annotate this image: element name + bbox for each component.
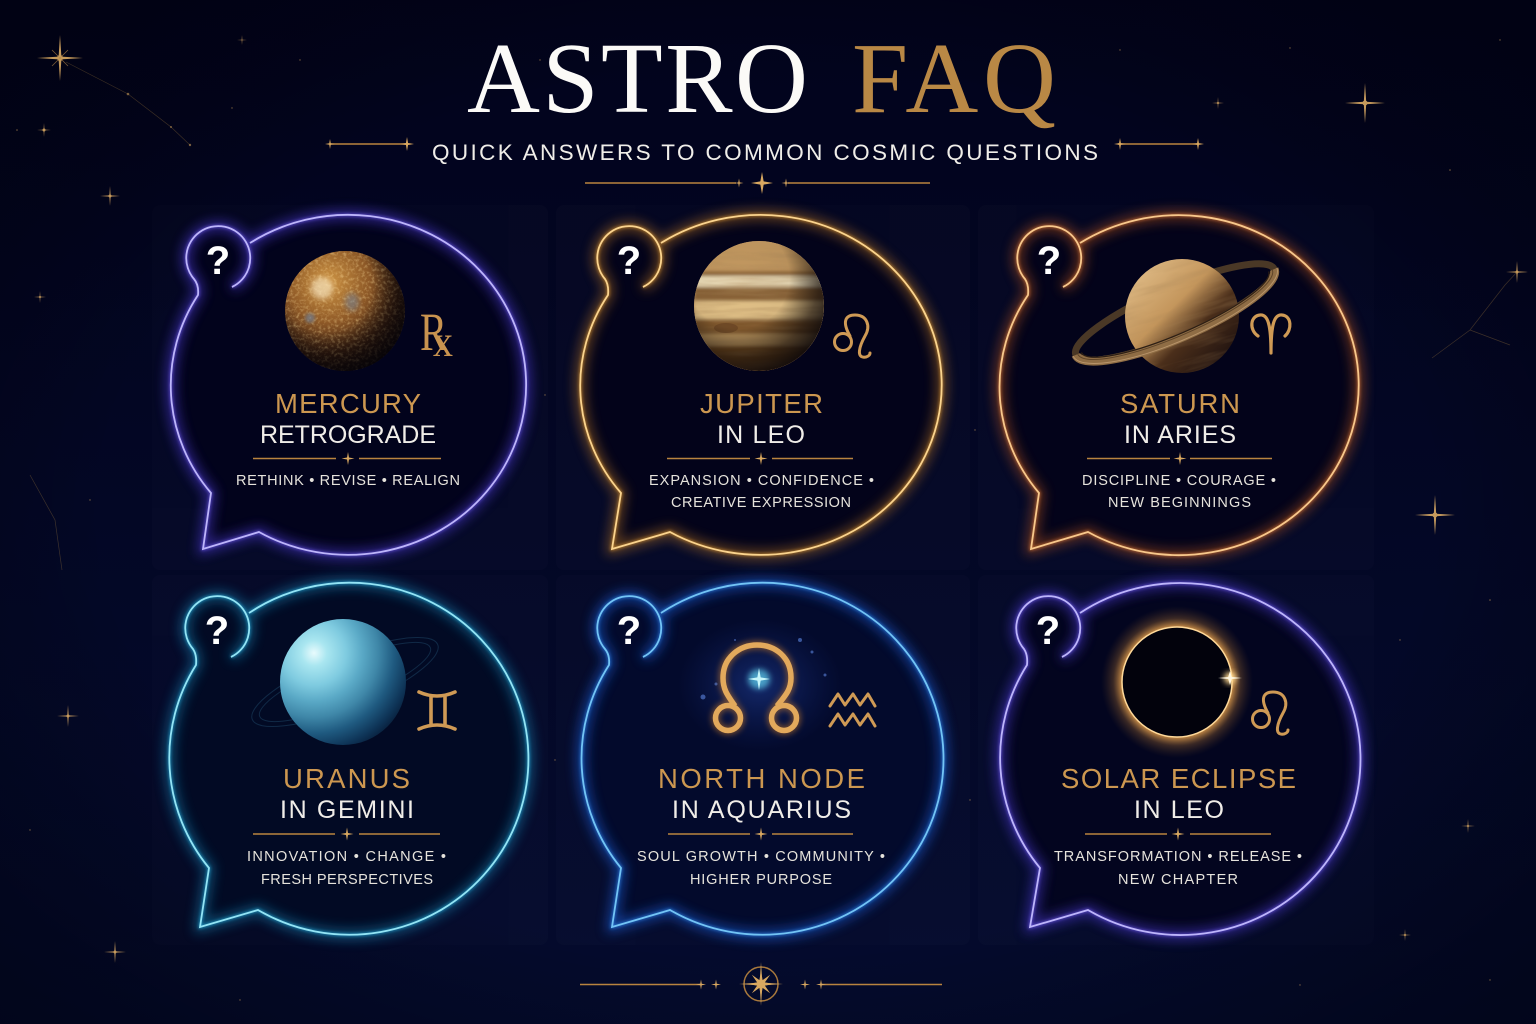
heading [1120,388,1240,449]
keywords: CREATIVE EXPRESSION [671,495,851,511]
heading: NORTH NODE [658,763,865,794]
divider [253,828,440,840]
divider [253,452,441,465]
question mark: ? [617,609,641,653]
bubble outline [171,215,526,555]
keywords: DISCIPLINE • COURAGE • [1082,473,1276,489]
keywords [247,849,446,888]
heading: IN LEO [1134,796,1224,824]
heading [260,388,436,449]
planet: Mercury [285,251,405,371]
bubble outline [1000,215,1359,555]
card: Saturn in Aries [1000,215,1359,555]
symbol: North Node [716,645,796,730]
keywords: FRESH PERSPECTIVES [261,872,433,888]
planet: Jupiter [694,241,824,372]
keywords [649,473,874,511]
symbol: Aries [1252,315,1290,353]
keywords [1082,473,1276,511]
eclipse [1101,606,1253,758]
heading: SOLAR ECLIPSE [1061,763,1296,794]
card: Uranus in Gemini [169,583,528,935]
divider [667,452,853,465]
title: ASTRO [467,22,808,134]
divider [1085,828,1271,840]
header ornaments [325,137,1204,194]
keywords: HIGHER PURPOSE [690,872,832,888]
planet: Saturn [1072,259,1280,373]
question mark: ? [617,239,641,283]
question mark: ? [206,239,230,283]
divider [668,828,853,840]
heading: JUPITER [700,388,823,419]
keywords: EXPANSION • CONFIDENCE • [649,473,874,489]
heading: IN GEMINI [280,796,414,824]
keywords: NEW BEGINNINGS [1108,495,1251,511]
heading [658,763,865,824]
heading [280,763,414,824]
heading: SATURN [1120,388,1240,419]
question mark: ? [1037,239,1061,283]
planet: Uranus [243,619,447,745]
symbol: retrograde: R [420,302,447,362]
symbol: Aquarius [830,694,875,726]
nebula [678,619,842,751]
bubble outline [169,583,528,935]
card: Solar Eclipse in Leo [1000,583,1360,935]
keywords [1054,849,1302,888]
symbol: retrograde: x [433,317,453,366]
keywords: RETHINK • REVISE • REALIGN [236,473,460,489]
footer ornament [580,962,942,1006]
keywords: INNOVATION • CHANGE • [247,849,446,865]
heading: URANUS [283,763,410,794]
heading [700,388,823,449]
question mark: ? [205,609,229,653]
keywords [637,849,885,888]
heading: IN AQUARIUS [672,796,851,824]
keywords: SOUL GROWTH • COMMUNITY • [637,849,885,865]
card: North Node in Aquarius [582,583,944,935]
symbol: Gemini [419,692,455,729]
heading: IN LEO [717,421,805,449]
divider [1087,452,1272,465]
subtitle: QUICK ANSWERS TO COMMON COSMIC QUESTIONS [432,140,1098,165]
bubble outline [1000,583,1360,935]
bubble outline [580,215,942,555]
bubble outline [582,583,944,935]
heading: MERCURY [275,388,421,419]
title: FAQ [852,22,1056,134]
title [467,22,1056,134]
question mark: ? [1036,609,1060,653]
symbol: Leo [1252,692,1288,734]
heading: IN ARIES [1124,421,1236,449]
heading [1061,763,1296,824]
symbol: Leo [834,315,870,357]
keywords: NEW CHAPTER [1118,872,1238,888]
card: Jupiter in Leo [580,215,942,555]
card: Mercury Retrograde [171,215,526,555]
keywords: TRANSFORMATION • RELEASE • [1054,849,1302,865]
heading: RETROGRADE [260,421,436,449]
